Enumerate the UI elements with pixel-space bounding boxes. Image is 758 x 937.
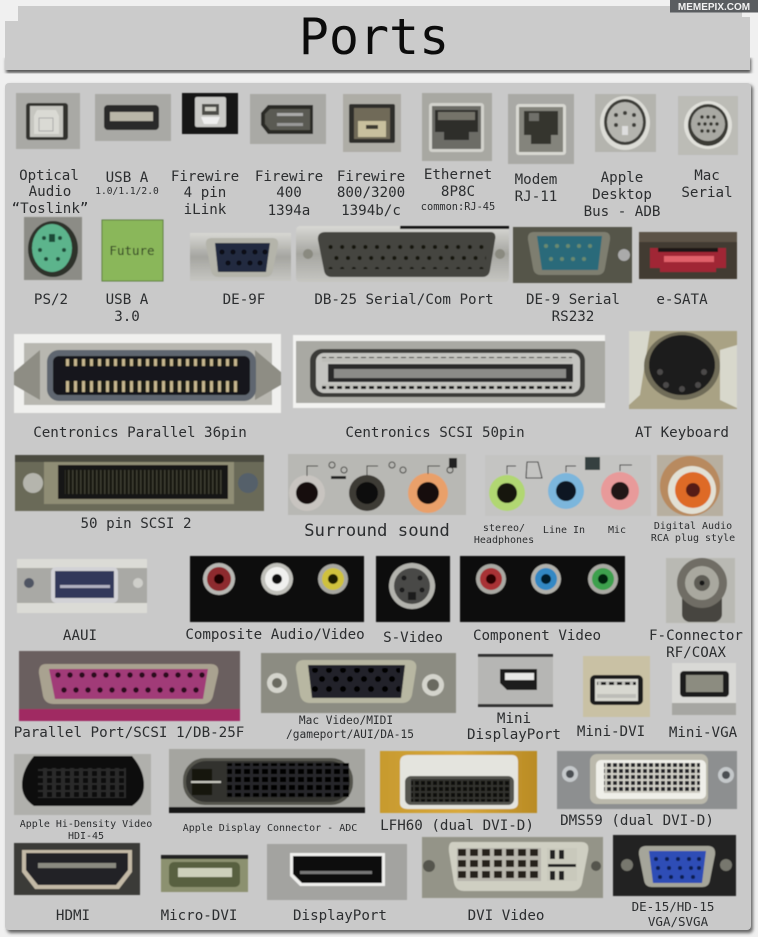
- icon: centronics parallel 36 pin: [14, 334, 281, 413]
- label: mini DisplayPort: DisplayPort: [467, 727, 561, 743]
- label: DisplayPort: DisplayPort: [293, 908, 387, 924]
- label: stereo headphones: Headphones: [474, 535, 534, 546]
- icon: mac serial: [678, 96, 738, 155]
- icon: composite audio video: [190, 556, 364, 622]
- icon: DMS59 dual DVI-D: [557, 751, 737, 809]
- label: mini DisplayPort: Mini: [497, 711, 531, 727]
- label: F-connector: RF/COAX: [666, 645, 726, 661]
- label: LFH60: LFH60 (dual DVI-D): [380, 818, 534, 834]
- label: PS/2: PS/2: [34, 292, 68, 308]
- label: DE-9 serial: RS232: [552, 309, 594, 325]
- icon: apple desktop bus: [595, 94, 656, 152]
- label: Apple HDI-45: HDI-45: [68, 831, 104, 842]
- label: Apple Display Connector: Apple Display Connector - ADC: [183, 823, 357, 834]
- label: firewire 4 pin: iLink: [184, 202, 227, 218]
- label: line in: Line In: [543, 525, 585, 536]
- label: S-video: S-Video: [383, 630, 443, 646]
- icon: micro-DVI: [161, 855, 248, 892]
- label: USB A 3.0: 3.0: [114, 309, 140, 325]
- icon: Apple HDI-45: [14, 754, 151, 815]
- label: apple desktop bus: Apple: [601, 170, 643, 186]
- label: mac serial: Serial: [681, 185, 733, 201]
- label: DB-25: DB-25 Serial/Com Port: [314, 292, 494, 308]
- icon: mini-DVI: [583, 656, 650, 717]
- label: USB A: USB A: [106, 170, 148, 186]
- label: digital audio: Digital Audio: [654, 521, 732, 532]
- icon: F-connector: [666, 558, 735, 623]
- icon: component video: [460, 556, 625, 622]
- label: optical audio: Audio: [29, 184, 71, 200]
- label: ethernet: common:RJ-45: [421, 201, 495, 213]
- label: stereo headphones: stereo/: [483, 523, 525, 534]
- label: DVI video: DVI Video: [468, 908, 544, 924]
- icon: mini-VGA: [672, 663, 736, 715]
- label: composite: Composite Audio/Video: [185, 627, 365, 643]
- icon: modem: [508, 94, 574, 164]
- label: optical audio: “Toslink”: [12, 201, 88, 217]
- label: ethernet: 8P8C: [441, 184, 475, 200]
- title: Ports: [299, 8, 449, 66]
- label: VGA: VGA/SVGA: [648, 914, 709, 929]
- icon: surround sound jacks: [288, 454, 466, 515]
- label: digital audio: RCA plug style: [651, 533, 735, 544]
- icon: mini DisplayPort: [478, 654, 553, 707]
- label: centronics parallel: Centronics Parallel 36pin: [33, 425, 247, 441]
- label: mini-DVI: Mini-DVI: [577, 724, 645, 740]
- title panel: [5, 6, 751, 73]
- label: firewire 4 pin: Firewire: [171, 169, 239, 185]
- icon: VGA: [613, 835, 736, 896]
- icon: Mac video DA-15: [261, 653, 456, 713]
- icon: optical audio: [16, 93, 80, 149]
- icon: centronics SCSI 50 pin: [293, 335, 605, 408]
- label: HDMI: HDMI: [56, 908, 90, 924]
- label: apple desktop bus: Bus - ADB: [584, 204, 660, 220]
- label: USB A: 1.0/1.1/2.0: [95, 186, 159, 197]
- icon: AAUI: [17, 559, 147, 613]
- watermark: MEMEPIX.COM: [678, 2, 750, 13]
- label: firewire 800: 800/3200: [337, 185, 405, 201]
- icon: USB A 3.0 future: Future: [109, 243, 155, 258]
- icon: firewire 800: [343, 94, 401, 152]
- icon: USB A 3.0 future: [102, 220, 163, 281]
- icon: firewire 400: [250, 94, 326, 144]
- label: optical audio: Optical: [19, 168, 79, 184]
- icon: USB A: [95, 94, 171, 141]
- label: DE-9F: DE-9F: [223, 292, 265, 308]
- icon: ethernet: [422, 93, 492, 161]
- label: DE-9 serial: DE-9 Serial: [526, 292, 620, 308]
- icon: parallel port DB-25F: [19, 651, 240, 721]
- watermark: [670, 0, 758, 13]
- label: apple desktop bus: Desktop: [592, 187, 652, 203]
- icon: PS/2: [24, 217, 82, 280]
- label: Apple HDI-45: Apple Hi-Density Video: [20, 819, 152, 830]
- label: firewire 4 pin: 4 pin: [184, 185, 226, 201]
- label: e-SATA: e-SATA: [656, 292, 708, 308]
- label: centronics SCSI: Centronics SCSI 50pin: [345, 425, 525, 441]
- icon: S-Video: [376, 556, 450, 622]
- label: Mac video: /gameport/AUI/DA-15: [286, 728, 414, 741]
- label: AAUI: AAUI: [63, 628, 97, 644]
- icon: e-SATA: [639, 232, 737, 279]
- label: parallel port: Parallel Port/SCSI 1/DB-25F: [14, 725, 244, 741]
- icon: DB-25: [296, 226, 509, 282]
- label: VGA: DE-15/HD-15: [632, 899, 714, 914]
- label: DMS59: DMS59 (dual DVI-D): [560, 813, 714, 829]
- icon: DE-9F: [190, 233, 291, 281]
- icon: stereo, line in, mic jacks: [485, 455, 651, 516]
- label: micro-DVI: Micro-DVI: [161, 908, 237, 924]
- label: modem: RJ-11: [515, 189, 557, 205]
- icon: AT keyboard: [629, 331, 737, 409]
- label: surround sound: Surround sound: [304, 521, 450, 541]
- icon: RCA digital audio: [657, 455, 723, 516]
- icon: LFH60 dual DVI-D: [380, 751, 537, 813]
- label: firewire 400: Firewire: [255, 169, 323, 185]
- icon: DisplayPort: [267, 844, 407, 900]
- icon: DE-9 serial: [513, 227, 632, 283]
- label: USB A 3.0: USB A: [106, 292, 148, 308]
- label: modem: Modem: [515, 172, 557, 188]
- label: mic: Mic: [608, 525, 626, 536]
- label: Mac video: Mac Video/MIDI: [299, 714, 393, 727]
- icon: 50 pin SCSI 2: [15, 455, 264, 511]
- label: firewire 400: 1394a: [268, 203, 310, 219]
- label: ethernet: Ethernet: [424, 167, 492, 183]
- icon: DVI video: [422, 837, 603, 898]
- label: mac serial: Mac: [694, 168, 720, 184]
- icon: firewire 4 pin: [182, 93, 238, 134]
- icon: HDMI: [14, 843, 140, 895]
- label: firewire 400: 400: [276, 185, 302, 201]
- label: component video: Component Video: [473, 628, 601, 644]
- label: firewire 800: Firewire: [337, 169, 405, 185]
- label: F-connector: F-Connector: [649, 628, 743, 644]
- label: firewire 800: 1394b/c: [341, 203, 401, 219]
- label: 50 pin SCSI 2: 50 pin SCSI 2: [80, 516, 192, 532]
- label: mini-VGA: Mini-VGA: [669, 725, 738, 741]
- icon: Apple Display Connector: [169, 749, 365, 813]
- label: AT keyboard: AT Keyboard: [635, 425, 729, 441]
